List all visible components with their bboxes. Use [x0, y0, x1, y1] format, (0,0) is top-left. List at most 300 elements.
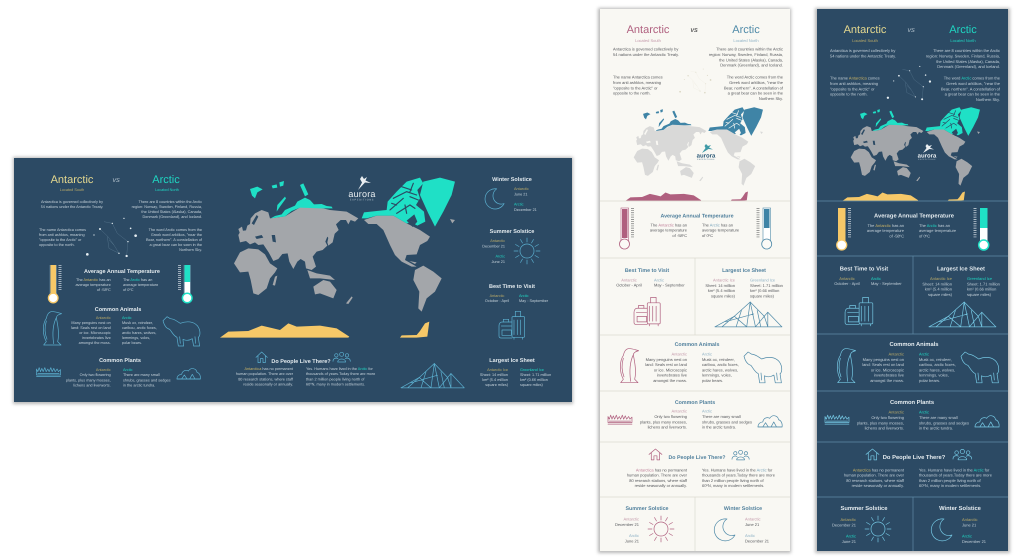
text: Greenland ice sheet: km² (0.66 million — [750, 288, 779, 293]
text: Winter dates: June 21 — [962, 522, 977, 528]
text: Arctic plants: There are many small — [702, 414, 741, 419]
text: Summer dates: Arctic — [496, 254, 505, 258]
text: Antarctica name origin: from anti ashktos, meaning — [830, 81, 878, 86]
text: Arctic animals: polar bears. — [702, 378, 723, 383]
subtitle: Located North: Located North — [155, 188, 179, 192]
text: Antarctic visit time: October - April — [485, 299, 509, 303]
text: Arctic animals: polar bears. — [122, 341, 142, 345]
icon: sun — [648, 516, 674, 542]
text: Arctic name origin: Greek word arktikos, "near the — [151, 233, 202, 237]
text: Antarctic ice sheet: Antarctic Ice — [930, 276, 953, 281]
thermometer: Antarctic — [48, 265, 60, 303]
heading: Winter Solstice: Winter Solstice — [724, 506, 762, 512]
text: Arctic name origin: The word Arctic comes from the — [944, 76, 1000, 80]
text: Arctic people: than 2 million people living north of — [919, 478, 981, 483]
text: Arctic countries: region: Norway, Sweden, Finland, Russia, — [926, 53, 1000, 58]
text: Winter dates: Antarctic — [745, 516, 761, 522]
thermometer: Arctic — [180, 265, 192, 303]
logo: aurora expeditions — [918, 144, 937, 161]
text: Antarctic plants: Antarctic — [671, 408, 687, 414]
text: Greenland ice sheet: Greenland Ice — [750, 278, 776, 282]
text: Antarctic temperature: average temperature — [650, 228, 688, 233]
text: Arctic temperature: The Arctic has an — [123, 278, 152, 282]
text: Antarctic plants: Only two flowering — [80, 373, 111, 377]
text: Winter dates: Arctic — [745, 533, 755, 538]
text: Arctic animals: lemmings, voles, — [919, 373, 949, 378]
text: Antarctic visit time: Antarctic — [839, 276, 855, 281]
map: world with polar regions — [220, 178, 455, 338]
text: Arctic countries: There are 8 countries within the Arctic — [716, 46, 783, 52]
subtitle: Located South: Located South — [60, 188, 84, 192]
text: Arctic name origin: The word Arctic comes from the — [149, 228, 202, 232]
text: Winter dates: June 21 — [745, 522, 760, 527]
text: Arctic visit time: Arctic — [519, 294, 529, 298]
text: Summer dates: Antarctic — [490, 239, 505, 243]
icon: constellation — [86, 218, 137, 257]
text: Greenland ice sheet: square miles) — [750, 293, 775, 298]
logo: aurora expeditions: aurora — [348, 189, 376, 199]
text: Arctic animals: caribou, arctic foxes, — [919, 362, 956, 367]
text: Arctic people: 60ºN, many in modern settlements. — [702, 483, 764, 488]
text: Greenland ice sheet: square miles) — [967, 292, 992, 297]
text: Arctic people: thousands of years.Today there are more — [306, 372, 375, 376]
icon: people — [953, 449, 972, 460]
text: Antarctica name origin: The name Antarctica comes — [613, 74, 663, 80]
text: Antarctic people: 80 research stations, where staff — [629, 478, 688, 483]
heading: Do People Live There?: Do People Live There? — [271, 359, 331, 365]
text: Antarctic people: human population. There are over — [844, 473, 905, 478]
icon: tundra grass — [608, 415, 632, 424]
text: Antarctic animals: Many penguins nest on — [71, 321, 111, 325]
icon: sun — [514, 238, 540, 264]
icon: ice sheet — [401, 364, 464, 388]
text: Greenland ice sheet: Greenland Ice — [520, 368, 544, 372]
icon: luggage — [634, 297, 660, 326]
icon: tundra grass — [825, 415, 849, 424]
text: Arctic countries: Denmark (Greenland), and Iceland. — [142, 215, 202, 219]
text: Summer dates: December 21 — [615, 522, 640, 527]
icon: constellation — [887, 66, 931, 100]
text: Summer dates: Antarctic — [840, 517, 856, 522]
section dividers — [817, 201, 1008, 551]
text: Antarctic animals: amongst the moss. — [79, 341, 111, 345]
text: Greenland ice sheet: Sheet: 1.71 million — [967, 281, 1000, 286]
text: Arctic temperature: The Arctic has an — [702, 222, 733, 228]
text: Antarctic temperature: The Antarctic has an — [651, 222, 687, 228]
heading: Winter Solstice: Winter Solstice — [939, 505, 982, 512]
text: Arctic plants: shrubs, grasses and sedges — [702, 419, 752, 424]
text: Greenland ice sheet: km² (0.66 million — [967, 287, 996, 292]
text: Antarctic ice sheet: Sheet: 14 million — [480, 373, 508, 377]
text: Arctic name origin: The word Arctic comes from the — [727, 74, 783, 80]
heading: Average Annual Temperature: Average Annual Temperature — [874, 212, 955, 220]
text: Arctic animals: caribou, arctic foxes, — [122, 326, 157, 330]
text: Antarctic plants: Only two flowering — [871, 415, 904, 420]
heading: Largest Ice Sheet: Largest Ice Sheet — [722, 268, 766, 274]
text: Summer dates: June 21 — [625, 538, 640, 544]
text: Arctic countries: region: Norway, Sweden, Finland, Russia, — [132, 205, 202, 209]
thermometer: Arctic — [758, 208, 772, 249]
heading: Common Plants: Common Plants — [675, 400, 715, 406]
logo: aurora expeditions: EXPEDITIONS — [697, 158, 715, 161]
text: Summer dates: Arctic — [629, 533, 639, 538]
text: Antarctic animals: invertebrates live — [874, 373, 905, 378]
text: Arctic animals: Musk ox, reindeer, — [702, 357, 735, 362]
text: Arctic name origin: a great bear can be seen in the — [945, 92, 1001, 97]
text: Arctic people: than 2 million people living north of — [306, 377, 365, 381]
icon: house — [866, 449, 879, 460]
heading: Largest Ice Sheet: Largest Ice Sheet — [937, 266, 985, 272]
panel: landscape navy infographic — [14, 158, 572, 402]
title: Antarctic: Antarctic — [51, 174, 94, 186]
heading: Average Annual Temperature: Average Annual Temperature — [84, 269, 160, 275]
heading: Common Plants: Common Plants — [890, 399, 934, 406]
text: Arctic plants: in the arctic tundra. — [123, 384, 155, 388]
text: Antarctic temperature: of -58ºC — [889, 233, 904, 238]
text: Antarctic plants: Antarctic — [888, 410, 904, 414]
text: Antarctic animals: land: Seals rest on land — [71, 326, 111, 330]
text: Arctic people: 60ºN, many in modern settlements. — [306, 383, 365, 387]
text: Antarctic people: reside seasonally or annually. — [635, 483, 687, 488]
text: Antarctic people: 80 research stations, where staff — [238, 377, 294, 381]
title: Arctic: Arctic — [949, 24, 977, 36]
text: Antarctic people: reside seasonally or annually. — [852, 483, 904, 488]
text: Antarctic ice sheet: Antarctic Ice — [713, 278, 736, 282]
text: Antarctic plants: lichens and liverworts. — [648, 425, 687, 430]
heading: Common Animals: Common Animals — [889, 341, 939, 348]
heading: Largest Ice Sheet: Largest Ice Sheet — [489, 358, 535, 364]
text: Antarctic animals: or ice. Microscopic — [79, 331, 111, 335]
text: Arctic temperature: The Arctic has an — [919, 223, 950, 228]
icon: people — [732, 450, 749, 460]
text: Antarctic plants: plants, plus many mosses, — [857, 420, 904, 425]
text: Arctic visit time: May - September — [519, 299, 549, 303]
text: Antarctic people: 80 research stations, where staff — [846, 478, 905, 483]
text: Arctic plants: There are many small — [123, 373, 160, 377]
text: Antarctic animals: invertebrates live — [82, 336, 111, 340]
text: Antarctic animals: amongst the moss. — [653, 378, 687, 383]
thermometer: Arctic — [975, 208, 989, 250]
icon: luggage — [845, 297, 873, 326]
title: Antarctic: Antarctic — [844, 24, 887, 36]
text: Arctic plants: in the arctic tundra. — [919, 426, 953, 431]
icon: polar bear — [744, 352, 782, 383]
text: Arctic animals: Arctic — [702, 352, 712, 356]
text: Arctic visit time: Arctic — [871, 276, 881, 281]
text: Arctic countries: the United States (Alaska), Canada, — [936, 59, 1000, 64]
text: Arctic animals: lemmings, voles, — [702, 373, 732, 378]
text: Antarctic animals: land: Seals rest on land — [862, 362, 904, 367]
text: Antarctic ice sheet: Sheet: 14 million — [922, 281, 952, 286]
text: Antarctica name origin: opposite to the north. — [39, 243, 75, 247]
text: Antarctic visit time: Antarctic — [621, 278, 637, 282]
heading: Best Time to Visit: Best Time to Visit — [840, 266, 888, 272]
text: Arctic name origin: Bear, northern". A constellation of — [941, 86, 1001, 91]
text: Antarctic people: Antarctica has no permanent — [853, 468, 904, 472]
text: Arctic plants: shrubs, grasses and sedges — [919, 420, 969, 425]
panel: navy portrait infographic — [817, 9, 1008, 551]
text: Antarctica name origin: opposite to the north. — [830, 92, 868, 97]
text: Antarctic people: reside seasonally or annually. — [243, 383, 293, 387]
text: Arctic visit time: May - September — [871, 281, 902, 286]
text: Arctic countries: Denmark (Greenland), and Iceland. — [720, 63, 783, 68]
title: Arctic: Arctic — [152, 174, 180, 186]
text: Antarctic animals: Antarctic — [671, 352, 687, 356]
text: Antarctic plants: plants, plus many mosses, — [640, 419, 687, 424]
icon: polar bear — [961, 352, 999, 383]
text: Arctic countries: the United States (Alaska), Canada, — [719, 57, 783, 62]
text: Arctic animals: arctic hares, wolves, — [919, 367, 955, 372]
subtitle: Located South: Located South — [635, 38, 661, 43]
icon: luggage — [499, 311, 525, 339]
text: Summer dates: Arctic — [846, 534, 856, 538]
text: Arctic animals: lemmings, voles, — [122, 336, 150, 340]
icon: constellation — [679, 69, 711, 94]
text: Antarctic plants: lichens and liverworts. — [865, 426, 904, 431]
text: Antarctic temperature: The Antarctic has an — [76, 278, 111, 282]
text: Antarctic governance: Antarctica is governed collectively by — [41, 200, 103, 204]
text: Winter dates: Antarctic — [514, 187, 529, 191]
text: Arctic temperature: average temperature — [919, 228, 957, 233]
text: Antarctic animals: Many penguins nest on — [646, 357, 687, 362]
text: Antarctic visit time: October - April — [616, 283, 642, 288]
icon: moon — [485, 189, 504, 209]
text: Antarctic people: human population. There are over — [627, 473, 688, 478]
text: Arctic people: Yes. Humans have lived in the Arctic for — [306, 367, 373, 371]
thermometer: Antarctic — [837, 208, 850, 250]
icon: shrub — [975, 416, 999, 427]
logo: aurora expeditions: EXPEDITIONS — [918, 158, 936, 161]
text: Antarctic animals: land: Seals rest on land — [645, 362, 687, 367]
text: Antarctic temperature: The Antarctic has an — [868, 223, 904, 228]
icon: ice sheet — [715, 302, 782, 327]
text: Arctic animals: Musk ox, reindeer, — [122, 321, 153, 325]
text: Arctic name origin: Northern Sky. — [759, 96, 783, 101]
icon: penguin — [837, 348, 856, 383]
heading: Common Plants: Common Plants — [99, 358, 141, 364]
text: Arctic name origin: Greek word arktikos, "near the — [729, 80, 784, 85]
heading: Summer Solstice: Summer Solstice — [840, 505, 888, 512]
heading: Common Animals: Common Animals — [95, 307, 141, 313]
versus label: VS — [907, 28, 915, 34]
text: Arctic plants: There are many small — [919, 415, 958, 420]
text: Arctic plants: shrubs, grasses and sedges — [123, 378, 171, 382]
subtitle: Located North: Located North — [733, 38, 759, 43]
icon: people — [333, 352, 350, 362]
text: Antarctic ice sheet: square miles) — [928, 292, 953, 297]
text: Greenland ice sheet: Sheet: 1.71 million — [750, 283, 783, 288]
logo: aurora expeditions — [348, 176, 376, 202]
heading: Do People Live There?: Do People Live There? — [668, 455, 726, 461]
logo: aurora expeditions: EXPEDITIONS — [350, 198, 374, 202]
text: Antarctic plants: lichens and liverworts. — [73, 384, 111, 388]
text: Winter dates: Antarctic — [962, 517, 978, 522]
text: Summer dates: December 21 — [482, 244, 505, 248]
text: Winter dates: December 21 — [962, 539, 987, 544]
text: Antarctic ice sheet: square miles) — [485, 383, 509, 387]
text: Arctic name origin: Bear, northern". A constellation of — [146, 238, 203, 242]
heading: Do People Live There?: Do People Live There? — [883, 454, 946, 461]
text: Arctic name origin: a great bear can be seen in the — [149, 243, 202, 247]
text: Antarctic ice sheet: Antarctic Ice — [487, 368, 508, 372]
text: Antarctic plants: Antarctic — [96, 368, 111, 372]
text: Antarctic animals: amongst the moss. — [870, 378, 904, 383]
text: Antarctic people: human population. There are over — [236, 372, 294, 376]
text: Greenland ice sheet: square miles) — [520, 383, 544, 387]
text: Arctic animals: Musk ox, reindeer, — [919, 357, 952, 362]
logo: aurora expeditions: aurora — [918, 154, 937, 160]
logo: aurora expeditions: aurora — [697, 154, 716, 160]
text: Arctic visit time: May - September — [654, 283, 685, 288]
versus label: VS — [690, 28, 698, 34]
text: Antarctic ice sheet: km² (5.4 million — [482, 378, 508, 382]
text: Antarctic plants: plants, plus many mosses, — [66, 378, 111, 382]
icon: moon — [714, 519, 735, 541]
text: Arctic plants: Arctic — [919, 410, 929, 414]
icon: ice sheet — [929, 302, 996, 327]
text: Antarctic animals: Antarctic — [888, 352, 904, 356]
icon: penguin — [43, 311, 62, 345]
title: Arctic: Arctic — [732, 24, 760, 36]
text: Arctic animals: arctic hares, wolves, — [702, 367, 738, 372]
text: Arctic animals: Arctic — [919, 352, 929, 356]
heading: Average Annual Temperature: Average Annual Temperature — [660, 214, 734, 220]
heading: Common Animals: Common Animals — [675, 342, 719, 348]
text: Arctic temperature: average temperature — [702, 228, 740, 233]
text: Antarctica name origin: "opposite to the Arctic" or — [613, 85, 658, 90]
text: Arctic people: Yes. Humans have lived in the Arctic for — [919, 468, 989, 472]
text: Arctic plants: in the arctic tundra. — [702, 425, 736, 430]
text: Antarctic governance: 54 nations under the Antarctic Treaty. — [830, 53, 896, 58]
icon: moon — [931, 519, 952, 541]
text: Arctic countries: region: Norway, Sweden, Finland, Russia, — [709, 52, 783, 57]
text: Antarctica name origin: The name Antarctica comes — [830, 76, 880, 80]
text: Winter dates: Arctic — [962, 534, 972, 538]
text: Antarctic temperature: of -58ºC — [672, 233, 687, 238]
subtitle: Located South: Located South — [852, 38, 878, 43]
text: Antarctica name origin: from anti ashktos, meaning — [39, 233, 85, 237]
text: Arctic animals: polar bears. — [919, 378, 940, 383]
section dividers — [600, 201, 790, 551]
text: Arctic countries: There are 8 countries within the Arctic — [138, 200, 202, 204]
icon: house — [256, 352, 267, 363]
text: Antarctic visit time: Antarctic — [490, 294, 504, 298]
text: Arctic animals: Arctic — [122, 316, 132, 320]
text: Arctic temperature: of 0ºC — [702, 233, 713, 238]
text: Antarctic ice sheet: Sheet: 14 million — [705, 283, 735, 288]
text: Summer dates: June 21 — [842, 539, 857, 544]
versus label: VS — [112, 178, 120, 184]
text: Antarctic ice sheet: square miles) — [711, 293, 736, 298]
text: Antarctic animals: or ice. Microscopic — [654, 367, 687, 372]
text: Antarctic animals: or ice. Microscopic — [871, 367, 904, 372]
title: Antarctic: Antarctic — [627, 24, 670, 36]
text: Antarctic animals: Many penguins nest on — [863, 357, 904, 362]
text: Arctic name origin: Bear, northern". A constellation of — [724, 85, 784, 90]
heading: Summer Solstice: Summer Solstice — [626, 506, 669, 512]
text: Arctic temperature: of 0ºC — [919, 233, 930, 238]
text: Winter dates: December 21 — [514, 208, 537, 212]
icon: sun — [865, 516, 891, 542]
text: Antarctic ice sheet: km² (5.4 million — [925, 287, 952, 292]
text: Summer dates: June 21 — [491, 260, 505, 264]
text: Antarctic ice sheet: km² (5.4 million — [708, 288, 735, 293]
icon: tundra grass — [36, 368, 60, 377]
text: Antarctic governance: Antarctica is governed collectively by — [613, 46, 678, 52]
text: Arctic name origin: a great bear can be seen in the — [728, 91, 784, 96]
text: Arctic people: 60ºN, many in modern settlements. — [919, 483, 981, 488]
text: Arctic people: than 2 million people living north of — [702, 478, 764, 483]
icon: polar bear — [163, 317, 200, 346]
text: Antarctic people: Antarctica has no permanent — [636, 468, 687, 472]
text: Antarctic temperature: average temperature — [75, 283, 111, 287]
logo: aurora expeditions — [697, 144, 716, 161]
text: Antarctic animals: Antarctic — [96, 316, 111, 320]
text: Antarctica name origin: The name Antarctica comes — [39, 228, 86, 232]
text: Antarctica name origin: "opposite to the Arctic" or — [39, 238, 82, 242]
heading: Best Time to Visit: Best Time to Visit — [625, 268, 669, 274]
text: Winter dates: June 21 — [514, 192, 528, 196]
text: Arctic animals: arctic hares, wolves, — [122, 331, 156, 335]
text: Antarctic visit time: October - April — [834, 281, 860, 286]
text: Antarctic governance: 54 nations under the Antarctic Treaty. — [41, 205, 103, 209]
text: Arctic visit time: Arctic — [654, 278, 664, 282]
text: Antarctica name origin: from anti ashktos, meaning — [613, 80, 661, 85]
icon: shrub — [758, 416, 782, 427]
icon: penguin — [620, 348, 639, 383]
subtitle: Located North: Located North — [950, 38, 976, 43]
thermometer: Antarctic — [620, 208, 632, 249]
text: Antarctic temperature: of -58ºC — [97, 288, 111, 292]
map: world with polar regions — [842, 107, 980, 201]
text: Antarctic governance: Antarctica is governed collectively by — [830, 48, 895, 53]
text: Arctic countries: There are 8 countries within the Arctic — [933, 48, 1000, 53]
text: Arctic plants: Arctic — [123, 368, 133, 372]
text: Arctic temperature: average temperature — [123, 283, 158, 287]
text: Summer dates: December 21 — [832, 522, 857, 528]
text: Arctic plants: Arctic — [702, 408, 712, 414]
text: Greenland ice sheet: Greenland Ice — [967, 276, 993, 281]
text: Arctic countries: the United States (Alaska), Canada, — [141, 210, 202, 214]
text: Antarctic governance: 54 nations under the Antarctic Treaty. — [613, 52, 679, 57]
text: Antarctica name origin: opposite to the north. — [613, 91, 651, 96]
text: Winter dates: Arctic — [514, 202, 524, 206]
text: Antarctica name origin: "opposite to the Arctic" or — [830, 86, 875, 91]
text: Arctic people: thousands of years.Today there are more — [919, 473, 993, 478]
panel: cream portrait infographic — [600, 9, 790, 551]
text: Arctic name origin: Northern Sky. — [976, 97, 1000, 102]
text: Greenland ice sheet: km² (0.66 million — [520, 378, 548, 382]
text: Antarctic animals: invertebrates live — [657, 373, 688, 378]
text: Greenland ice sheet: Sheet: 1.71 million — [520, 373, 551, 377]
heading: Best Time to Visit: Best Time to Visit — [489, 284, 535, 290]
text: Antarctic temperature: average temperature — [867, 228, 905, 233]
text: Arctic animals: caribou, arctic foxes, — [702, 362, 739, 367]
text: Arctic people: Yes. Humans have lived in the Arctic for — [702, 468, 772, 472]
text: Arctic name origin: Greek word arktikos, "near the — [946, 81, 1001, 86]
heading: Summer Solstice: Summer Solstice — [490, 229, 534, 235]
text: Antarctic plants: Only two flowering — [654, 414, 687, 419]
text: Summer dates: Antarctic — [623, 516, 639, 522]
icon: house — [649, 449, 662, 460]
text: Arctic people: thousands of years.Today there are more — [702, 473, 776, 478]
map: world with polar regions — [626, 107, 763, 201]
icon: shrub — [177, 369, 200, 379]
text: Antarctic people: Antarctica has no permanent — [244, 367, 293, 371]
text: Arctic name origin: Northern Sky. — [179, 248, 202, 252]
text: Winter dates: December 21 — [745, 538, 770, 544]
heading: Winter Solstice: Winter Solstice — [492, 177, 532, 183]
